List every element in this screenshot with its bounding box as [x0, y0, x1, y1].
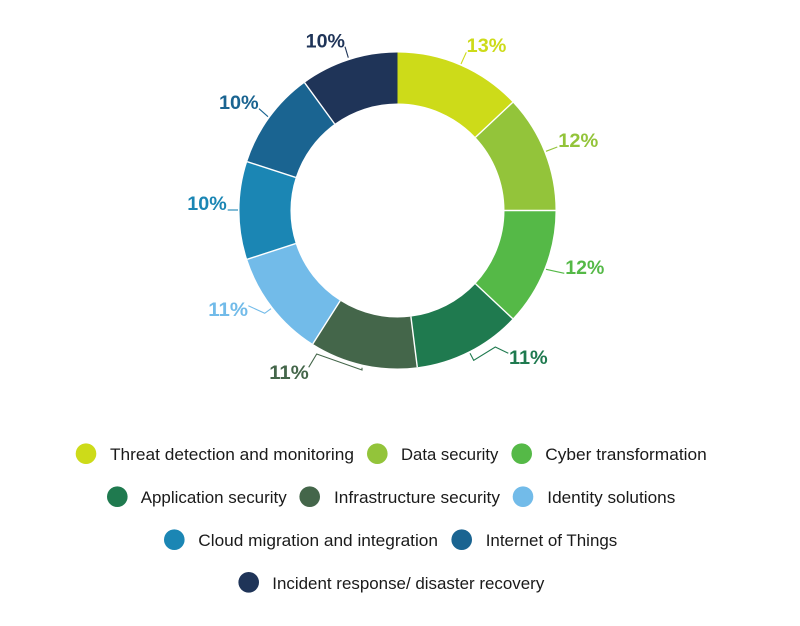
- legend item: incident response / disaster recovery: Incident response/ disaster recovery: [272, 574, 545, 593]
- legend item: data security: [367, 443, 499, 464]
- segment: cloud migration 10%: [239, 162, 296, 259]
- value label: 11% application security: [470, 347, 548, 369]
- legend item: cloud migration and integration: Cloud migration and integration: [198, 531, 438, 550]
- legend item: threat detection and monitoring: Threat detection and monitoring: [110, 445, 354, 464]
- segment: threat detection 13%: [398, 52, 513, 137]
- value label: 11% application security: 11%: [509, 348, 548, 369]
- value label: 11% infrastructure security: [269, 354, 362, 384]
- legend item: infrastructure security: Infrastructure security: [334, 488, 500, 507]
- segment: internet of things 10%: [247, 83, 335, 177]
- segment: identity solutions 11%: [247, 244, 340, 344]
- value label: 13%: 13%: [467, 36, 506, 57]
- value label: 12% cyber transformation: 12%: [565, 258, 604, 279]
- segment: incident response 10%: [305, 52, 398, 124]
- value label: 13%: [461, 36, 506, 64]
- value label: 12% data security: 12%: [558, 131, 598, 152]
- legend item: application security: Application security: [141, 488, 287, 507]
- value label: 10% incident response: 10%: [306, 31, 345, 52]
- legend: [76, 443, 707, 593]
- value label: 11% identity solutions: 11%: [208, 300, 248, 321]
- value label: 11% infrastructure security: 11%: [269, 363, 309, 384]
- segment: infrastructure security 11%: [313, 301, 417, 368]
- legend item: internet of things: Internet of Things: [486, 531, 617, 550]
- segment: application security 11%: [411, 284, 513, 367]
- value label: 11% identity solutions: [208, 300, 271, 321]
- value label: 12% cyber transformation: [546, 258, 604, 279]
- legend item: cyber transformation: Cyber transformation: [545, 445, 707, 464]
- segment: data security 12%: [476, 102, 556, 210]
- value label: 10% cloud migration: 10%: [187, 194, 227, 215]
- value label: 10% internet of things: [219, 93, 268, 117]
- donut chart: [239, 52, 556, 368]
- segment: cyber transformation 12%: [476, 210, 556, 319]
- value label: 10% internet of things: 10%: [219, 93, 259, 114]
- legend item: identity solutions: Identity solutions: [547, 488, 675, 507]
- legend item: data security: Data security: [401, 445, 499, 464]
